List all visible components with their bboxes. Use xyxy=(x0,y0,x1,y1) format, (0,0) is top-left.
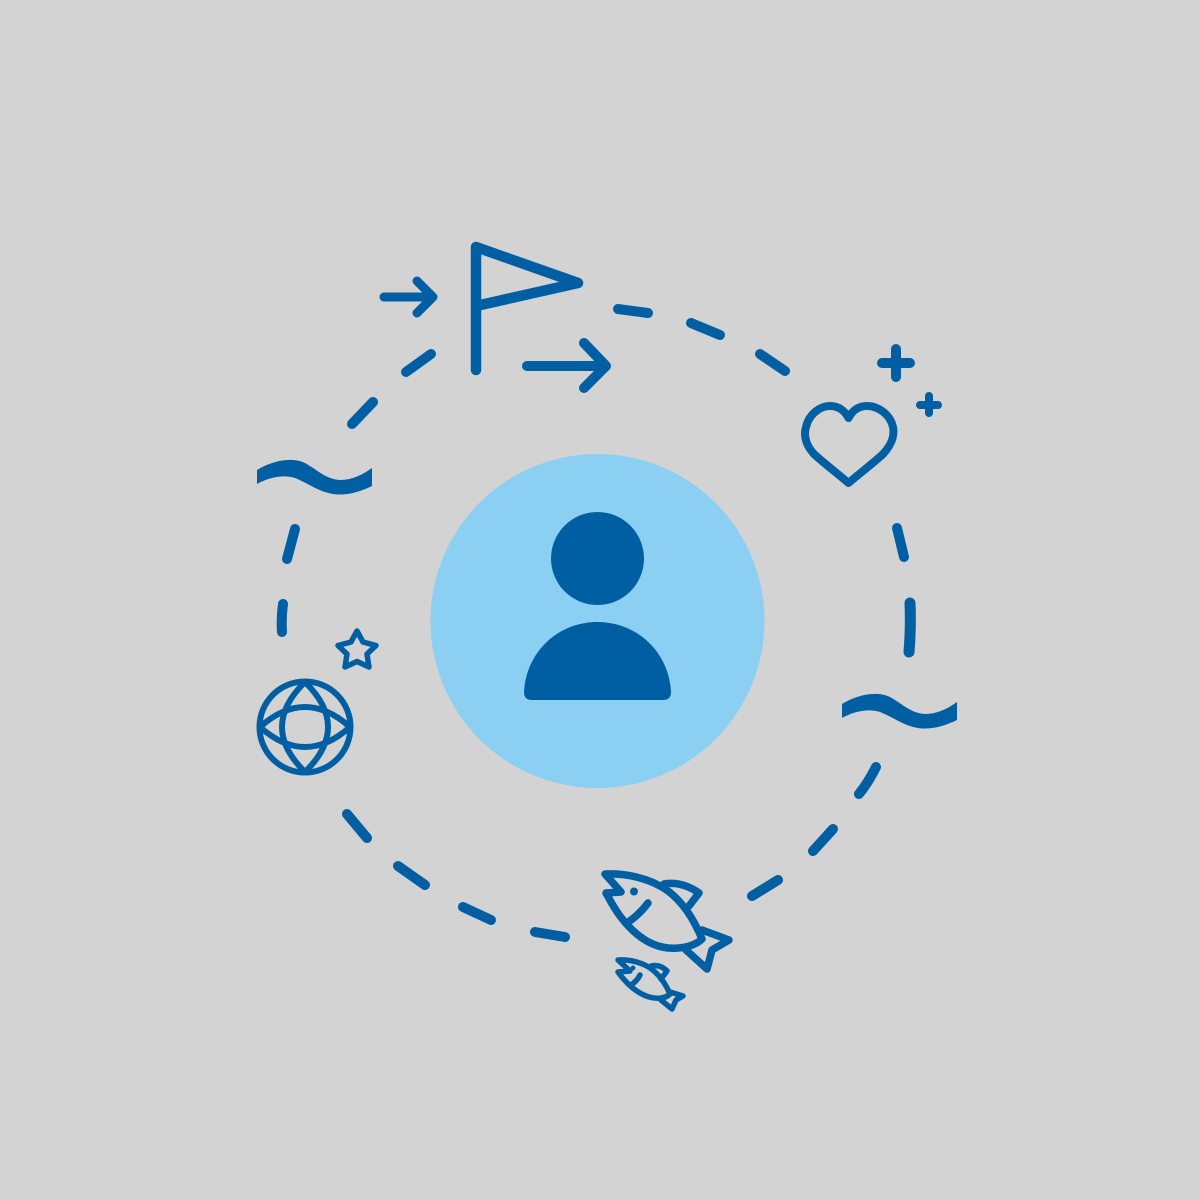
dashed ring xyxy=(282,309,910,937)
large fish xyxy=(605,874,729,969)
small fish xyxy=(618,960,683,1009)
icon: two fish xyxy=(605,874,729,1009)
large plus xyxy=(882,349,910,377)
central person badge xyxy=(430,454,764,788)
small plus xyxy=(920,396,938,413)
small arrow xyxy=(384,281,433,313)
flag xyxy=(476,247,578,370)
large arrow xyxy=(527,343,606,388)
icon: globe and star xyxy=(260,631,376,772)
icon: person head xyxy=(551,512,644,605)
wave left xyxy=(257,460,372,495)
icon: heart with plus signs xyxy=(805,349,938,483)
icon: flag with arrows xyxy=(384,247,606,388)
globe xyxy=(260,682,350,772)
wave right xyxy=(842,694,957,729)
icon: person shoulders xyxy=(524,622,671,700)
heart xyxy=(805,406,893,483)
star xyxy=(338,631,376,667)
